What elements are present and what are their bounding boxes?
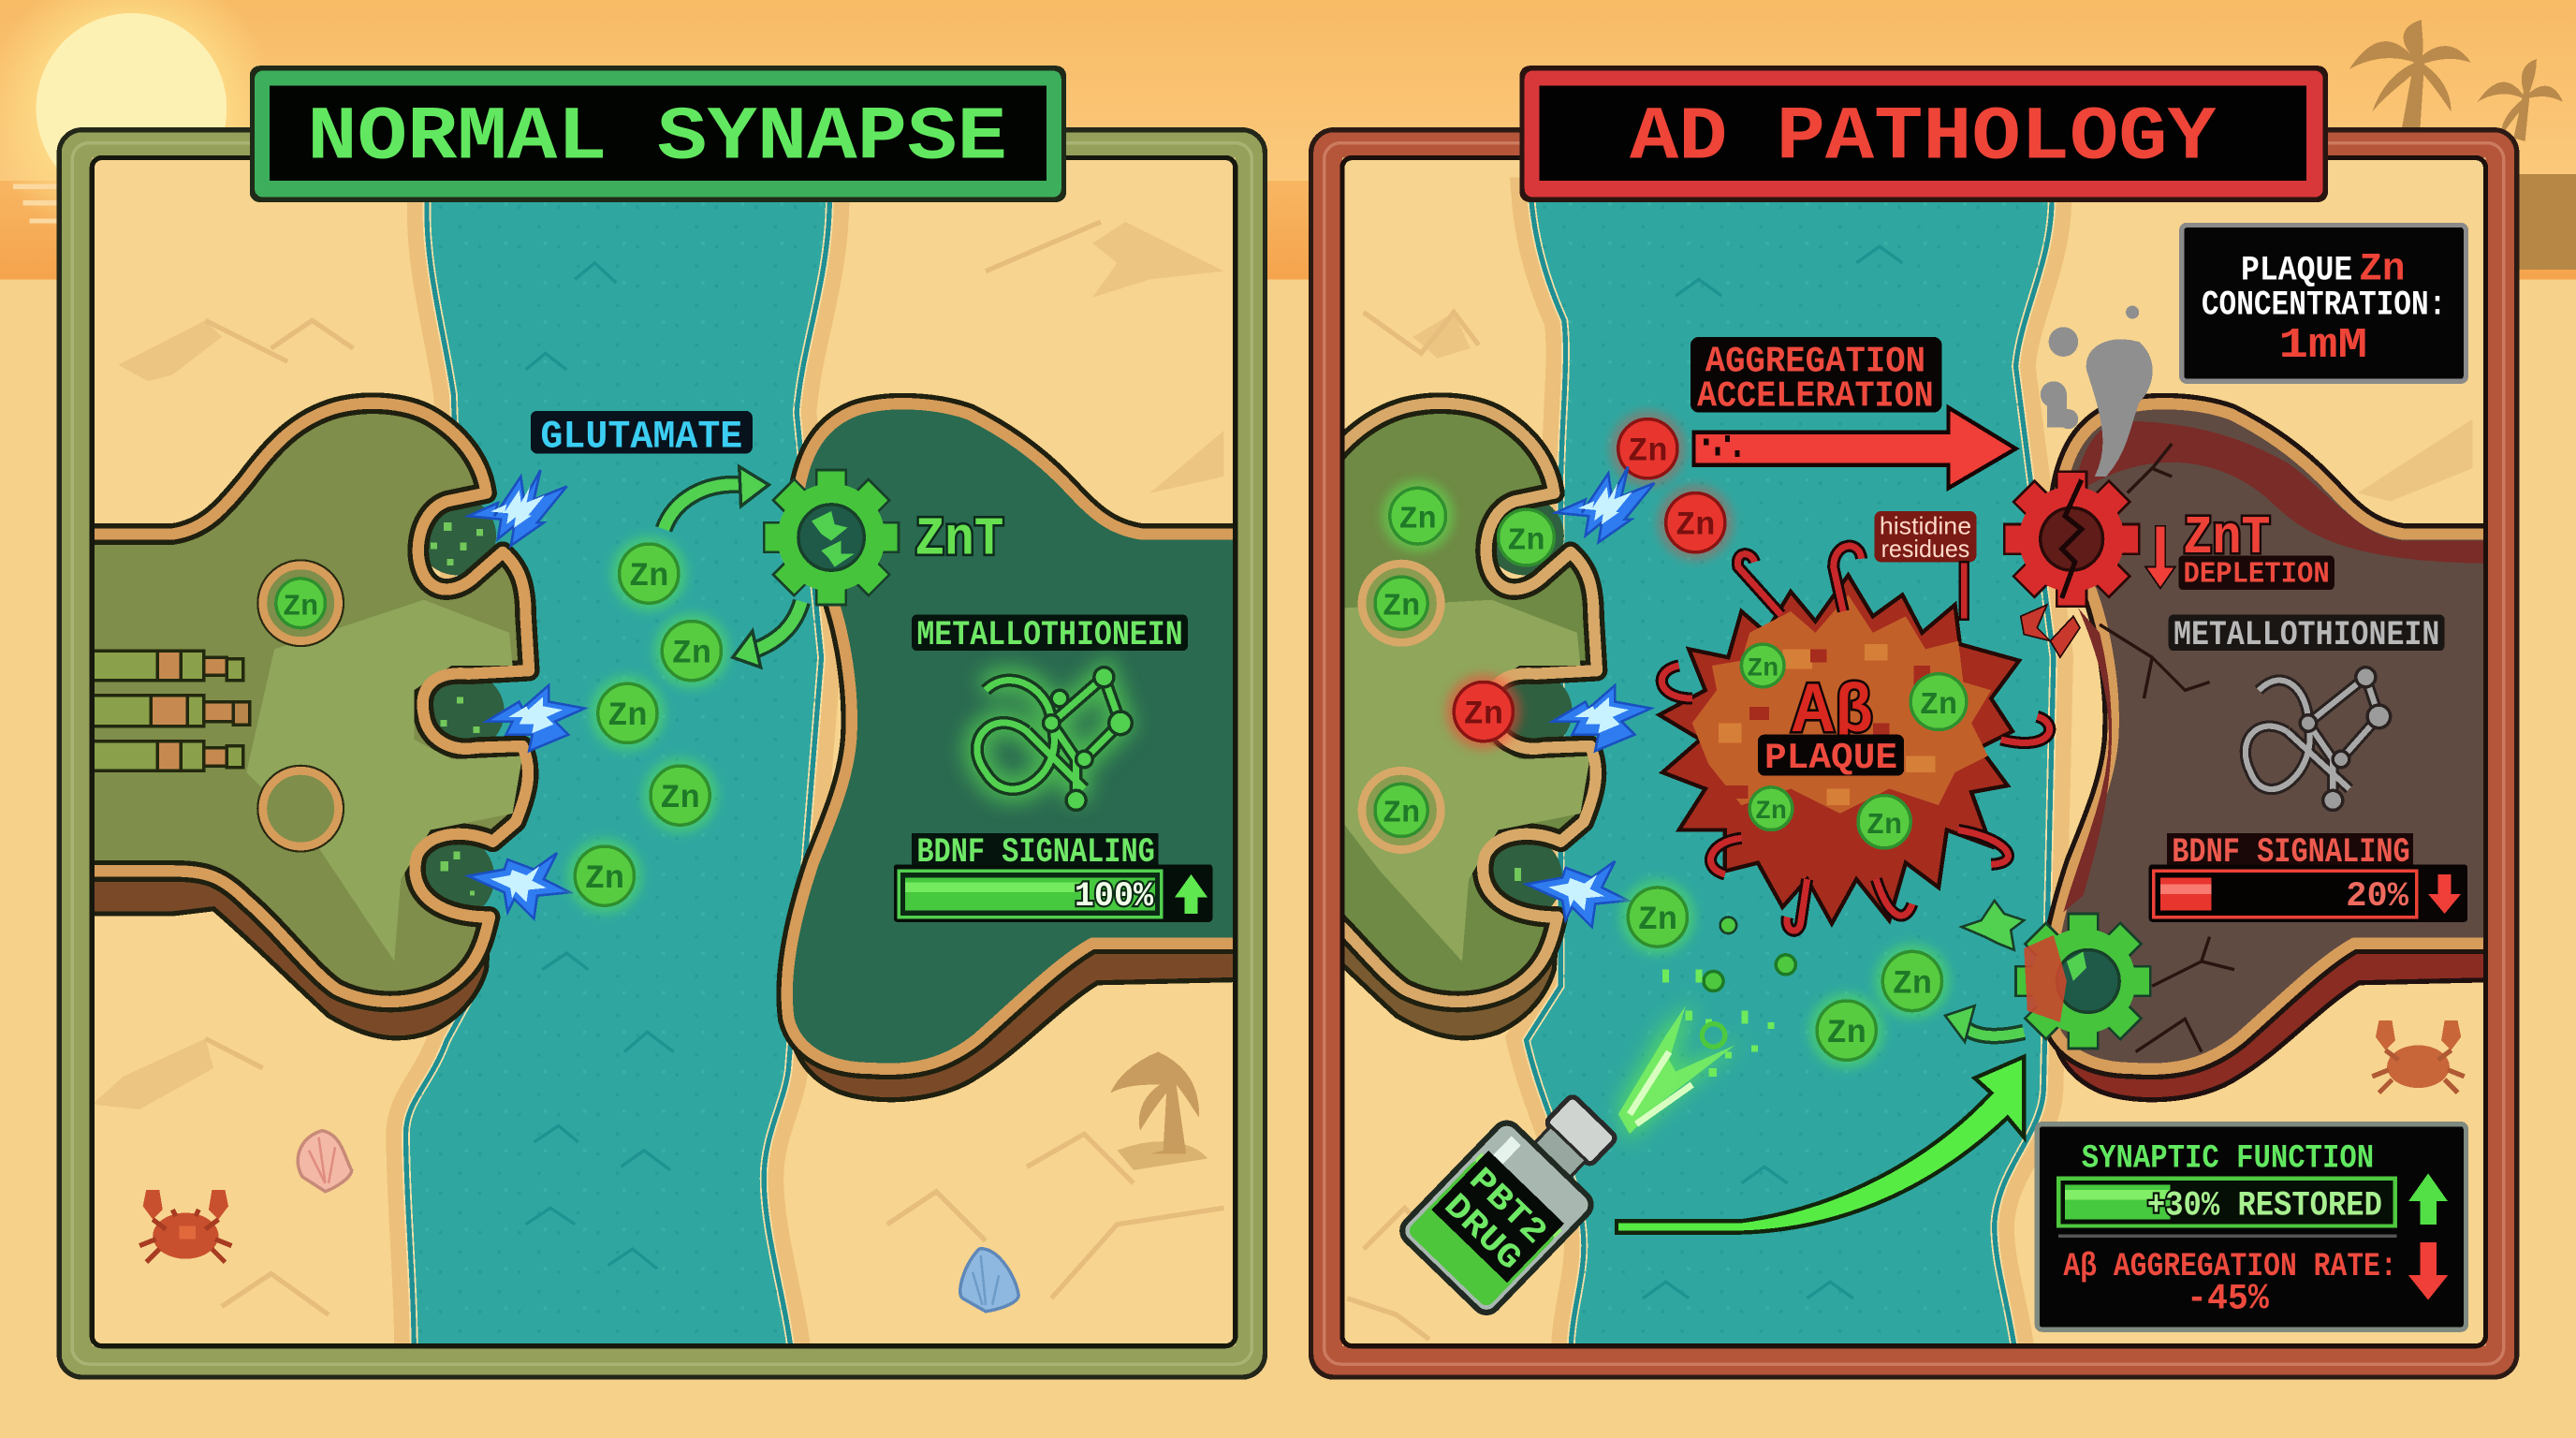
callout: histidine residues: histidine (1880, 514, 1971, 540)
embedded zinc (1741, 644, 1967, 848)
presynaptic neuron (66, 404, 529, 1038)
icon: recovering ZnT gear (2016, 914, 2150, 1049)
callout: histidine residues (1875, 511, 1976, 620)
callout: plaque Zn concentration: PLAQUE (2241, 251, 2352, 290)
callout: treatment results (2037, 1124, 2466, 1329)
zinc inside presynaptic terminal: Zn (1383, 590, 1420, 625)
label: ZnT depletion: DEPLETION (2184, 558, 2330, 591)
icon: green spark (1962, 901, 2024, 950)
red zinc ions: Zn (1464, 696, 1503, 733)
cracks in the membrane (2100, 444, 2234, 1051)
title: normal synapse: NORMAL SYNAPSE (307, 96, 1007, 182)
free zinc ions: Zn (672, 635, 711, 672)
beach scene (66, 158, 1249, 1356)
embedded zinc: Zn (1866, 810, 1902, 843)
icon: palm shadow (1110, 1051, 1208, 1170)
spray: released zinc and particles: Zn (1893, 965, 1932, 1003)
panel frame (59, 130, 1265, 1377)
arrow: zinc release (733, 601, 801, 668)
gauge: BDNF signaling 100% (894, 833, 1212, 922)
gauge: synaptic function: +30% RESTORED (2147, 1186, 2382, 1225)
icon: inactive molecule (2246, 668, 2391, 810)
label: ZnT: ZnT (915, 510, 1003, 571)
free zinc ions: Zn (629, 558, 668, 595)
zinc inside presynaptic terminal: Zn (1399, 502, 1437, 537)
drug label (1430, 1151, 1564, 1284)
label: plaque: PLAQUE (1764, 738, 1897, 779)
spray: released zinc and particles: Zn (1827, 1015, 1866, 1052)
spray: released zinc and particles (1618, 879, 1950, 1142)
gauge: BDNF signaling 100%: 100% (1075, 877, 1154, 917)
sand dunes (92, 222, 1224, 1109)
free zinc ions (567, 536, 729, 914)
callout: treatment results: -45% (2187, 1278, 2270, 1319)
tendrils (1661, 546, 2050, 931)
vesicle contents (431, 522, 483, 896)
red zinc ions: Zn (1628, 433, 1667, 471)
icon: crab (139, 1190, 231, 1262)
lightning: glutamate release (1526, 467, 1654, 927)
icon: palm trees (2349, 20, 2563, 141)
label: metallothionein: METALLOTHIONEIN (916, 616, 1183, 655)
river (406, 198, 829, 1356)
red zinc ions (1445, 411, 1734, 749)
panel: normal synapse (59, 66, 1265, 1377)
embedded zinc: Zn (1920, 688, 1957, 724)
icon: broken ZnT gear (2004, 472, 2139, 607)
label: ZnT depletion: ZnT (2184, 508, 2271, 569)
vesicle pockets (426, 506, 504, 906)
title: AD pathology (1519, 66, 2328, 202)
inner frame outline (1342, 158, 2485, 1346)
callout: treatment results: SYNAPTIC FUNCTION (2082, 1139, 2374, 1177)
label: aggregation acceleration: ACCELERATION (1697, 376, 1934, 418)
gear fragments (2021, 605, 2080, 657)
drug label: DRUG (1435, 1187, 1529, 1279)
postsynaptic neuron (2049, 404, 2510, 1100)
arrow: aggregation acceleration (1694, 407, 2016, 488)
vesicle ring with Zn: Zn (283, 592, 318, 624)
icon: down arrow (2428, 874, 2461, 914)
empty vesicle ring (258, 766, 344, 851)
axon pipes (92, 651, 250, 770)
zinc inside presynaptic terminal: Zn (1383, 797, 1420, 832)
lightning: glutamate release (468, 470, 585, 918)
icon: up arrow (2408, 1173, 2448, 1225)
drug label: PBT2 (1460, 1161, 1554, 1253)
zinc inside presynaptic terminal (1362, 480, 1554, 850)
icon: pink shell (298, 1131, 352, 1192)
free zinc ions: Zn (585, 860, 624, 898)
embedded zinc: Zn (1747, 654, 1778, 683)
icon: sun (0, 0, 276, 253)
icon: blue shell (960, 1249, 1018, 1312)
callout: histidine residues: residues (1881, 536, 1969, 563)
free zinc ions: Zn (661, 780, 700, 817)
icon: PBT2 drug bottle (1397, 1073, 1640, 1318)
free zinc ions: Zn (607, 697, 648, 735)
arrow: small recovery arrow (1945, 1005, 2024, 1042)
arrow: zinc uptake (664, 467, 768, 529)
smoke from broken ZnT (2041, 306, 2153, 477)
river (1526, 198, 2054, 1356)
label: metallothionein grey: METALLOTHIONEIN (2174, 616, 2439, 655)
panel: AD pathology (1309, 66, 2520, 1380)
sand dunes (1412, 313, 2472, 501)
gauge: BDNF signaling 20%: BDNF SIGNALING (2172, 833, 2410, 873)
postsynaptic neuron (787, 404, 1249, 1100)
gauge: BDNF signaling 20%: 20% (2346, 877, 2409, 917)
distant dune on the right (2519, 174, 2576, 270)
vesicle ring with Zn (258, 561, 344, 646)
arrow: drug effect (1617, 1057, 2024, 1233)
callout: plaque Zn concentration: CONCENTRATION: (2202, 286, 2446, 325)
icon: ZnT gear (764, 470, 899, 605)
zinc inside presynaptic terminal: Zn (1507, 523, 1545, 559)
red zinc ions: Zn (1676, 507, 1715, 545)
icon: down arrow (2408, 1242, 2448, 1300)
gauge: synaptic function (2058, 1179, 2395, 1226)
icon: metallothionein molecule (977, 668, 1132, 810)
label: ZnT depletion (2145, 508, 2334, 591)
panel frame (1311, 130, 2517, 1377)
beach scene (1342, 157, 2486, 1346)
gauge: BDNF signaling 20% (2149, 833, 2467, 922)
icon: faded crab (2372, 1020, 2465, 1093)
callout: treatment results: Aβ AGGREGATION RATE: (2063, 1248, 2397, 1285)
callout: plaque Zn concentration: Zn (2359, 246, 2405, 291)
icon: up arrow (1175, 874, 1208, 914)
title: normal synapse (250, 66, 1066, 202)
callout: plaque Zn concentration (2182, 225, 2466, 381)
plaque: amyloid beta (1660, 546, 2050, 931)
embedded zinc: Zn (1755, 798, 1787, 827)
label: glutamate: GLUTAMATE (540, 414, 742, 459)
label: A-beta: Aβ (1791, 668, 1873, 746)
inner frame outline (92, 158, 1236, 1346)
title: AD pathology: AD PATHOLOGY (1630, 96, 2217, 182)
label: aggregation acceleration (1690, 337, 1942, 418)
icon: down arrow (2145, 526, 2175, 588)
presynaptic neuron (1344, 393, 1608, 1041)
spray: released zinc and particles: Zn (1638, 902, 1677, 939)
callout: plaque Zn concentration: 1mM (2278, 321, 2367, 370)
label: aggregation acceleration: AGGREGATION (1705, 342, 1925, 383)
gauge: BDNF signaling 100%: BDNF SIGNALING (916, 833, 1155, 873)
